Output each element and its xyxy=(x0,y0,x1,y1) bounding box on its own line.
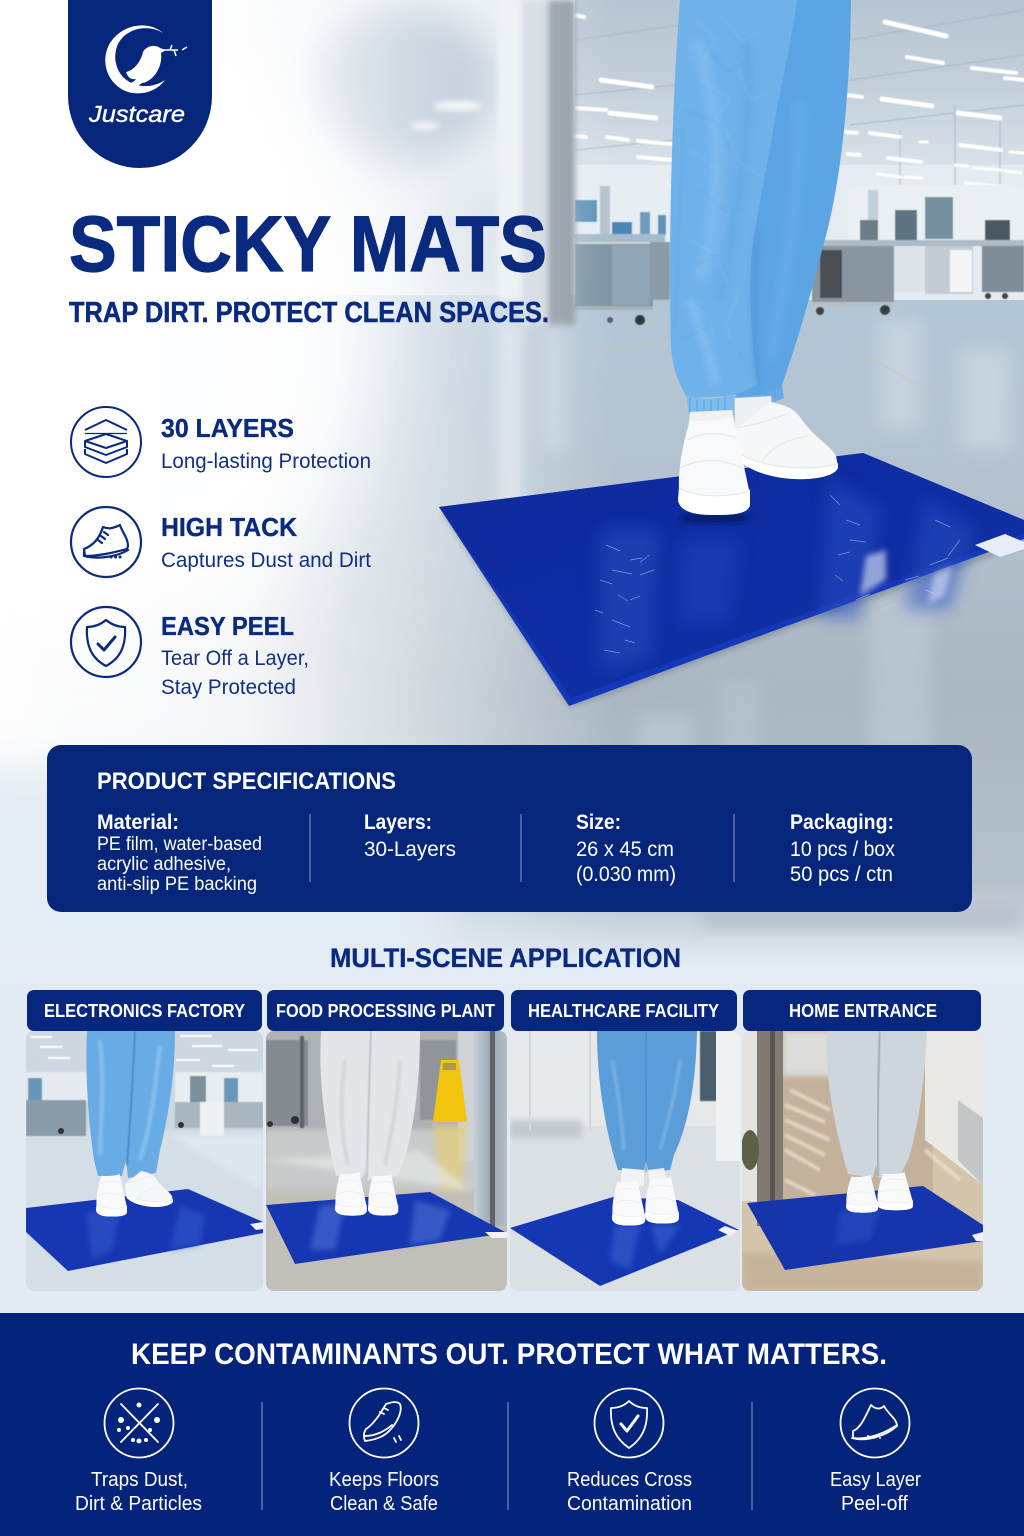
section heading: multi-scene application: MULTI-SCENE APPLICATION xyxy=(330,943,681,973)
benefit: easy layer peel-off xyxy=(830,1388,921,1515)
panel: product specifications xyxy=(47,745,972,912)
benefit: easy layer peel-off: Peel-off xyxy=(841,1493,908,1515)
icon: shield check xyxy=(594,1388,664,1458)
scene tab: electronics factory: ELECTRONICS FACTORY xyxy=(44,1000,246,1021)
logo badge: Justcare xyxy=(68,0,212,168)
icon: shoe on floor xyxy=(350,1388,418,1458)
feature: 30 layers xyxy=(71,407,371,477)
scene tab: healthcare facility xyxy=(511,990,737,1031)
feature description: Long-lasting Protection xyxy=(161,450,371,473)
feature: high tack xyxy=(71,507,371,577)
benefit: reduces cross contamination xyxy=(567,1388,692,1515)
icon: shoe peeling xyxy=(840,1388,910,1458)
benefit: traps dust: Traps Dust, xyxy=(91,1469,188,1491)
spec: layers xyxy=(364,811,456,861)
trouser crumple texture xyxy=(684,15,770,356)
spec: material xyxy=(97,811,262,895)
benefit: traps dust xyxy=(75,1388,202,1515)
footer heading: KEEP CONTAMINANTS OUT. PROTECT WHAT MATTERS. xyxy=(131,1338,887,1371)
icon: crossed-out particles xyxy=(104,1388,174,1458)
icon: crescent and dove xyxy=(105,25,187,93)
feature heading: HIGH TACK xyxy=(161,512,297,542)
scene photo: healthcare facility xyxy=(510,1031,740,1291)
spec: material: PE film, water-based xyxy=(97,834,262,855)
icon: shield with check xyxy=(71,607,141,677)
logo wordmark: Justcare xyxy=(88,101,185,127)
spec: material: Material: xyxy=(97,811,179,834)
feature description: Tear Off a Layer, xyxy=(161,647,309,670)
benefit: reduces cross contamination: Reduces Cross xyxy=(567,1469,692,1491)
scene photo: home entrance xyxy=(741,1031,983,1291)
subtitle: TRAP DIRT. PROTECT CLEAN SPACES. xyxy=(69,297,549,329)
scene tab: electronics factory xyxy=(27,990,262,1031)
benefit: easy layer peel-off: Easy Layer xyxy=(830,1469,921,1491)
spec: size: (0.030 mm) xyxy=(576,863,676,886)
icon: sneaker xyxy=(71,507,141,577)
scene photo: food processing plant xyxy=(266,1031,507,1291)
benefit: keeps floors clean xyxy=(329,1388,439,1515)
scene tab: healthcare facility: HEALTHCARE FACILITY xyxy=(528,1000,720,1021)
feature heading: 30 LAYERS xyxy=(161,413,294,443)
hero photo: cleanroom factory scene xyxy=(0,0,1024,950)
specifications heading: PRODUCT SPECIFICATIONS xyxy=(97,768,396,795)
title: STICKY MATS xyxy=(69,199,547,288)
feature heading: EASY PEEL xyxy=(161,611,294,641)
benefit: keeps floors clean: Keeps Floors xyxy=(329,1469,439,1491)
spec: packaging: 50 pcs / ctn xyxy=(790,863,893,886)
worker legs in blue cleanroom trousers xyxy=(670,0,851,416)
scene tab: food processing plant: FOOD PROCESSING PLANT xyxy=(276,1000,496,1021)
scene photo: electronics factory xyxy=(26,1031,263,1291)
scene tab: home entrance xyxy=(743,990,981,1031)
blue sticky mat xyxy=(439,453,1024,708)
spec: layers: 30-Layers xyxy=(364,838,456,861)
benefit: reduces cross contamination: Contamination xyxy=(567,1493,692,1515)
feature description: Captures Dust and Dirt xyxy=(161,549,371,572)
white cleanroom shoes xyxy=(678,396,838,523)
spec: packaging: Packaging: xyxy=(790,811,894,834)
benefit: keeps floors clean: Clean & Safe xyxy=(330,1493,438,1515)
spec: material: anti-slip PE backing xyxy=(97,874,257,895)
background machinery xyxy=(574,184,1024,326)
spec: size: 26 x 45 cm xyxy=(576,838,674,861)
footer band: benefits xyxy=(0,1313,1024,1536)
spec: layers: Layers: xyxy=(364,811,432,834)
benefit: traps dust: Dirt & Particles xyxy=(75,1493,202,1515)
scene tab: food processing plant xyxy=(267,990,504,1031)
spec: packaging: 10 pcs / box xyxy=(790,838,895,861)
feature description line two: Stay Protected xyxy=(161,676,296,699)
spec: material: acrylic adhesive, xyxy=(97,854,231,875)
scene tab: home entrance: HOME ENTRANCE xyxy=(789,1000,937,1021)
spec: packaging xyxy=(790,811,895,886)
spec: size xyxy=(576,811,676,886)
feature: easy peel xyxy=(71,607,309,699)
icon: stacked layers xyxy=(71,407,141,477)
spec: size: Size: xyxy=(576,811,621,834)
